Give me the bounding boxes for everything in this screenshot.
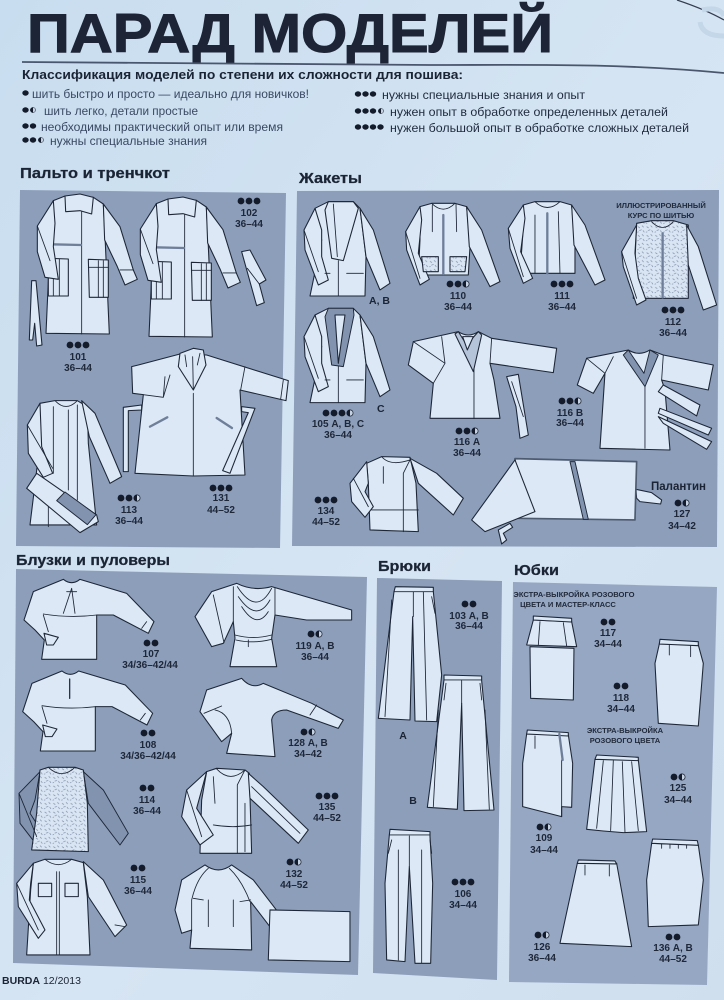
label: model 134: 44–52 (312, 517, 340, 528)
label: model 132: 44–52 (280, 880, 308, 891)
label: model 112: 112 (665, 317, 682, 328)
label: pink pattern note 1 (513, 590, 635, 609)
label: model 128 (288, 729, 328, 760)
label: model 118: 118 (613, 693, 630, 704)
label: model 134 (312, 497, 340, 528)
label: variant C: С (377, 403, 385, 415)
legend heading: Классификация моделей по степени их сложности для пошива: (22, 68, 463, 82)
heading: skirts: Юбки (514, 563, 559, 579)
belt of coat 101 (29, 281, 42, 346)
blouse 107 drawing (24, 579, 154, 659)
label: model 117: 117 (600, 628, 617, 639)
label: model 119: 119 А, В (296, 641, 334, 652)
label: model 111: 36–44 (548, 302, 576, 313)
label: model 116 B (556, 398, 584, 429)
label: model 119 (296, 631, 334, 663)
blouse 108 drawing (23, 671, 153, 751)
jacket 105 C drawing (304, 308, 390, 403)
label: course note (616, 201, 706, 220)
label: pink pattern note 2: ЭКСТРА-ВЫКРОЙКА (587, 726, 664, 735)
coat 102 drawing (140, 197, 240, 337)
label: model 131: 44–52 (207, 505, 235, 516)
coats panel background (16, 190, 286, 548)
legend level 4: нужен большой опыт в обработке сложных деталей (390, 121, 689, 135)
label: model 108: 108 (140, 740, 157, 751)
blouses panel background (13, 569, 367, 975)
label: variant A: А (399, 730, 407, 742)
label: model 134: 134 (318, 506, 335, 517)
skirt 125 drawing (587, 755, 647, 833)
label: pink pattern note 2 (587, 726, 664, 745)
label: model 108 (120, 730, 176, 762)
coat 101 drawing (37, 194, 137, 334)
label: model 103: 36–44 (455, 621, 483, 632)
title: ПАРАД МОДЕЛЕЙ (27, 1, 553, 64)
label: model 108: 34/36–42/44 (120, 751, 176, 762)
label: model 119: 36–44 (301, 652, 329, 663)
trousers panel background (373, 578, 502, 980)
label: model 114: 114 (139, 795, 156, 806)
label: model 117: 34–44 (594, 639, 622, 650)
label: model 106: 34–44 (449, 900, 477, 911)
label: model 136 (653, 934, 693, 965)
label: model 116 A (453, 428, 481, 459)
label: model 101: 36–44 (64, 363, 92, 374)
label: pink pattern note 1: ЭКСТРА-ВЫКРОЙКА РОЗОВОГО (513, 590, 635, 599)
jacket 134 drawing (350, 457, 463, 532)
label: model 125 (664, 774, 692, 806)
label: course note: КУРС ПО ШИТЬЮ (628, 211, 694, 220)
heading: jackets: Жакеты (298, 171, 362, 187)
label: model 107: 107 (143, 649, 160, 660)
label: model 115: 36–44 (124, 886, 152, 897)
jacket 105 A, B drawing (304, 202, 390, 296)
label: model 127: 34–42 (668, 521, 696, 532)
heading: coats: Пальто и тренчкот (20, 166, 170, 182)
jacket 116 A drawing (408, 332, 557, 438)
label: model 102: 102 (241, 208, 258, 219)
jacket 112 drawing (622, 221, 717, 310)
label: model 126: 126 (534, 942, 551, 953)
skirt 126 drawing (560, 860, 632, 947)
heading: blouses: Блузки и пуловеры (16, 553, 170, 569)
panel: skirts (509, 582, 717, 985)
label: model 110: 110 (450, 291, 467, 302)
label: model 116 A: 36–44 (453, 448, 481, 459)
label: variant B: В (409, 795, 417, 807)
skirt 118 drawing (655, 639, 703, 726)
panel: coats (16, 190, 288, 548)
stole 127 drawing (472, 459, 662, 544)
label: model 107 (122, 640, 178, 671)
label: model 127 (668, 500, 696, 532)
label: model 109: 34–44 (530, 845, 558, 856)
label: model 103: 103 А, В (449, 611, 489, 622)
footer: magazine issue: BURDA 12/2013 (2, 975, 81, 987)
belt of coat 102 (242, 250, 266, 306)
label: model 116 A: 116 А (454, 437, 480, 448)
trousers 103 A drawing (378, 587, 442, 722)
legend level 3: нужны специальные знания и опыт (382, 88, 586, 102)
label: model 110 (444, 281, 472, 313)
label: model 101 (64, 342, 92, 374)
label: model 128: 34–42 (294, 749, 322, 760)
label: model 132 (280, 859, 308, 891)
blouse 114 drawing (19, 767, 128, 852)
scarf with blouse 132 (268, 910, 350, 962)
label: model 106 (449, 879, 477, 911)
label: model 105: 105 А, В, С (312, 419, 364, 430)
jacket 111 drawing (508, 202, 605, 285)
label: model 113: 36–44 (115, 516, 143, 527)
label: model 116 B: 36–44 (556, 418, 584, 429)
label: model 135: 44–52 (313, 813, 341, 824)
label: model 132: 132 (286, 869, 303, 880)
label: model 136: 44–52 (659, 954, 687, 965)
label: model 106: 106 (455, 889, 472, 900)
legend level 2: необходимы практический опыт или время (41, 120, 283, 134)
label: model 128: 128 А, В (288, 738, 328, 749)
legend level 1: шить быстро и просто — идеально для новичков! (32, 87, 309, 101)
label: model 112 (659, 307, 687, 339)
trousers 103 B drawing (427, 675, 494, 811)
label: model 107: 34/36–42/44 (122, 660, 178, 671)
label: model 113 (115, 495, 143, 527)
label: model 118 (607, 683, 635, 715)
panel: trousers (373, 578, 502, 980)
label: pink pattern note 2: РОЗОВОГО ЦВЕТА (590, 736, 661, 745)
panel: jackets (292, 190, 719, 547)
label: model 131: 131 (213, 493, 230, 504)
label: model 105: 36–44 (324, 430, 352, 441)
heading: trousers: Брюки (378, 559, 431, 575)
label: model 102: 36–44 (235, 219, 263, 230)
skirt 136 drawing (647, 839, 703, 927)
jacket 110 drawing (406, 203, 500, 287)
label: model 117 (594, 619, 622, 650)
label: model 131 (207, 485, 235, 516)
skirt 117 drawing (527, 616, 577, 700)
label: model 103 (449, 601, 489, 632)
jacket 116 B drawing (577, 350, 713, 450)
label: model 136: 136 А, В (653, 943, 693, 954)
label: model 114 (133, 785, 161, 817)
label: model 105 (312, 410, 364, 441)
panel: blouses and pullovers (13, 569, 367, 975)
label: pink pattern note 1: ЦВЕТА И МАСТЕР-КЛАСС (520, 600, 616, 609)
label: variant A, B: А, В (369, 295, 390, 307)
skirt 109 drawing (523, 730, 573, 817)
label: model 127: 127 (674, 509, 691, 520)
label: course note: ИЛЛЮСТРИРОВАННЫЙ (616, 201, 706, 210)
label: model 102 (235, 198, 263, 230)
label: model 101: 101 (70, 352, 87, 363)
legend: difficulty classification (22, 68, 689, 148)
blouse 132 drawing (175, 865, 287, 950)
label: model 111: 111 (554, 291, 570, 302)
jackets panel background (292, 190, 719, 547)
label: model 135 (313, 793, 341, 824)
label: model 135: 135 (319, 802, 336, 813)
label: model 109: 109 (536, 833, 553, 844)
blouse 119 drawing (195, 583, 352, 667)
blouse 115 drawing (17, 859, 127, 955)
trousers 106 drawing (385, 829, 433, 963)
label: model 115: 115 (130, 875, 147, 886)
label: stole name: Палантин (651, 481, 706, 493)
legend level 1.5: шить легко, детали простые (44, 104, 198, 118)
coat 113 drawing (27, 401, 122, 533)
skirts panel background (509, 582, 717, 985)
label: model 118: 34–44 (607, 704, 635, 715)
label: model 109 (530, 824, 558, 856)
label: model 114: 36–44 (133, 806, 161, 817)
label: model 116 B: 116 В (557, 408, 583, 419)
blouse 128 drawing (200, 678, 343, 757)
label: model 110: 36–44 (444, 302, 472, 313)
label: model 126: 36–44 (528, 953, 556, 964)
label: model 126 (528, 932, 556, 964)
label: model 115 (124, 865, 152, 897)
legend level 2.5: нужны специальные знания (50, 134, 207, 148)
legend level 3.5: нужен опыт в обработке определенных деталей (390, 105, 668, 119)
label: model 112: 36–44 (659, 328, 687, 339)
coat 131 drawing (123, 348, 288, 476)
label: model 125: 34–44 (664, 795, 692, 806)
label: model 113: 113 (121, 505, 138, 516)
label: model 111 (548, 281, 576, 313)
label: model 125: 125 (670, 783, 687, 794)
blouse 135 drawing (182, 768, 308, 853)
